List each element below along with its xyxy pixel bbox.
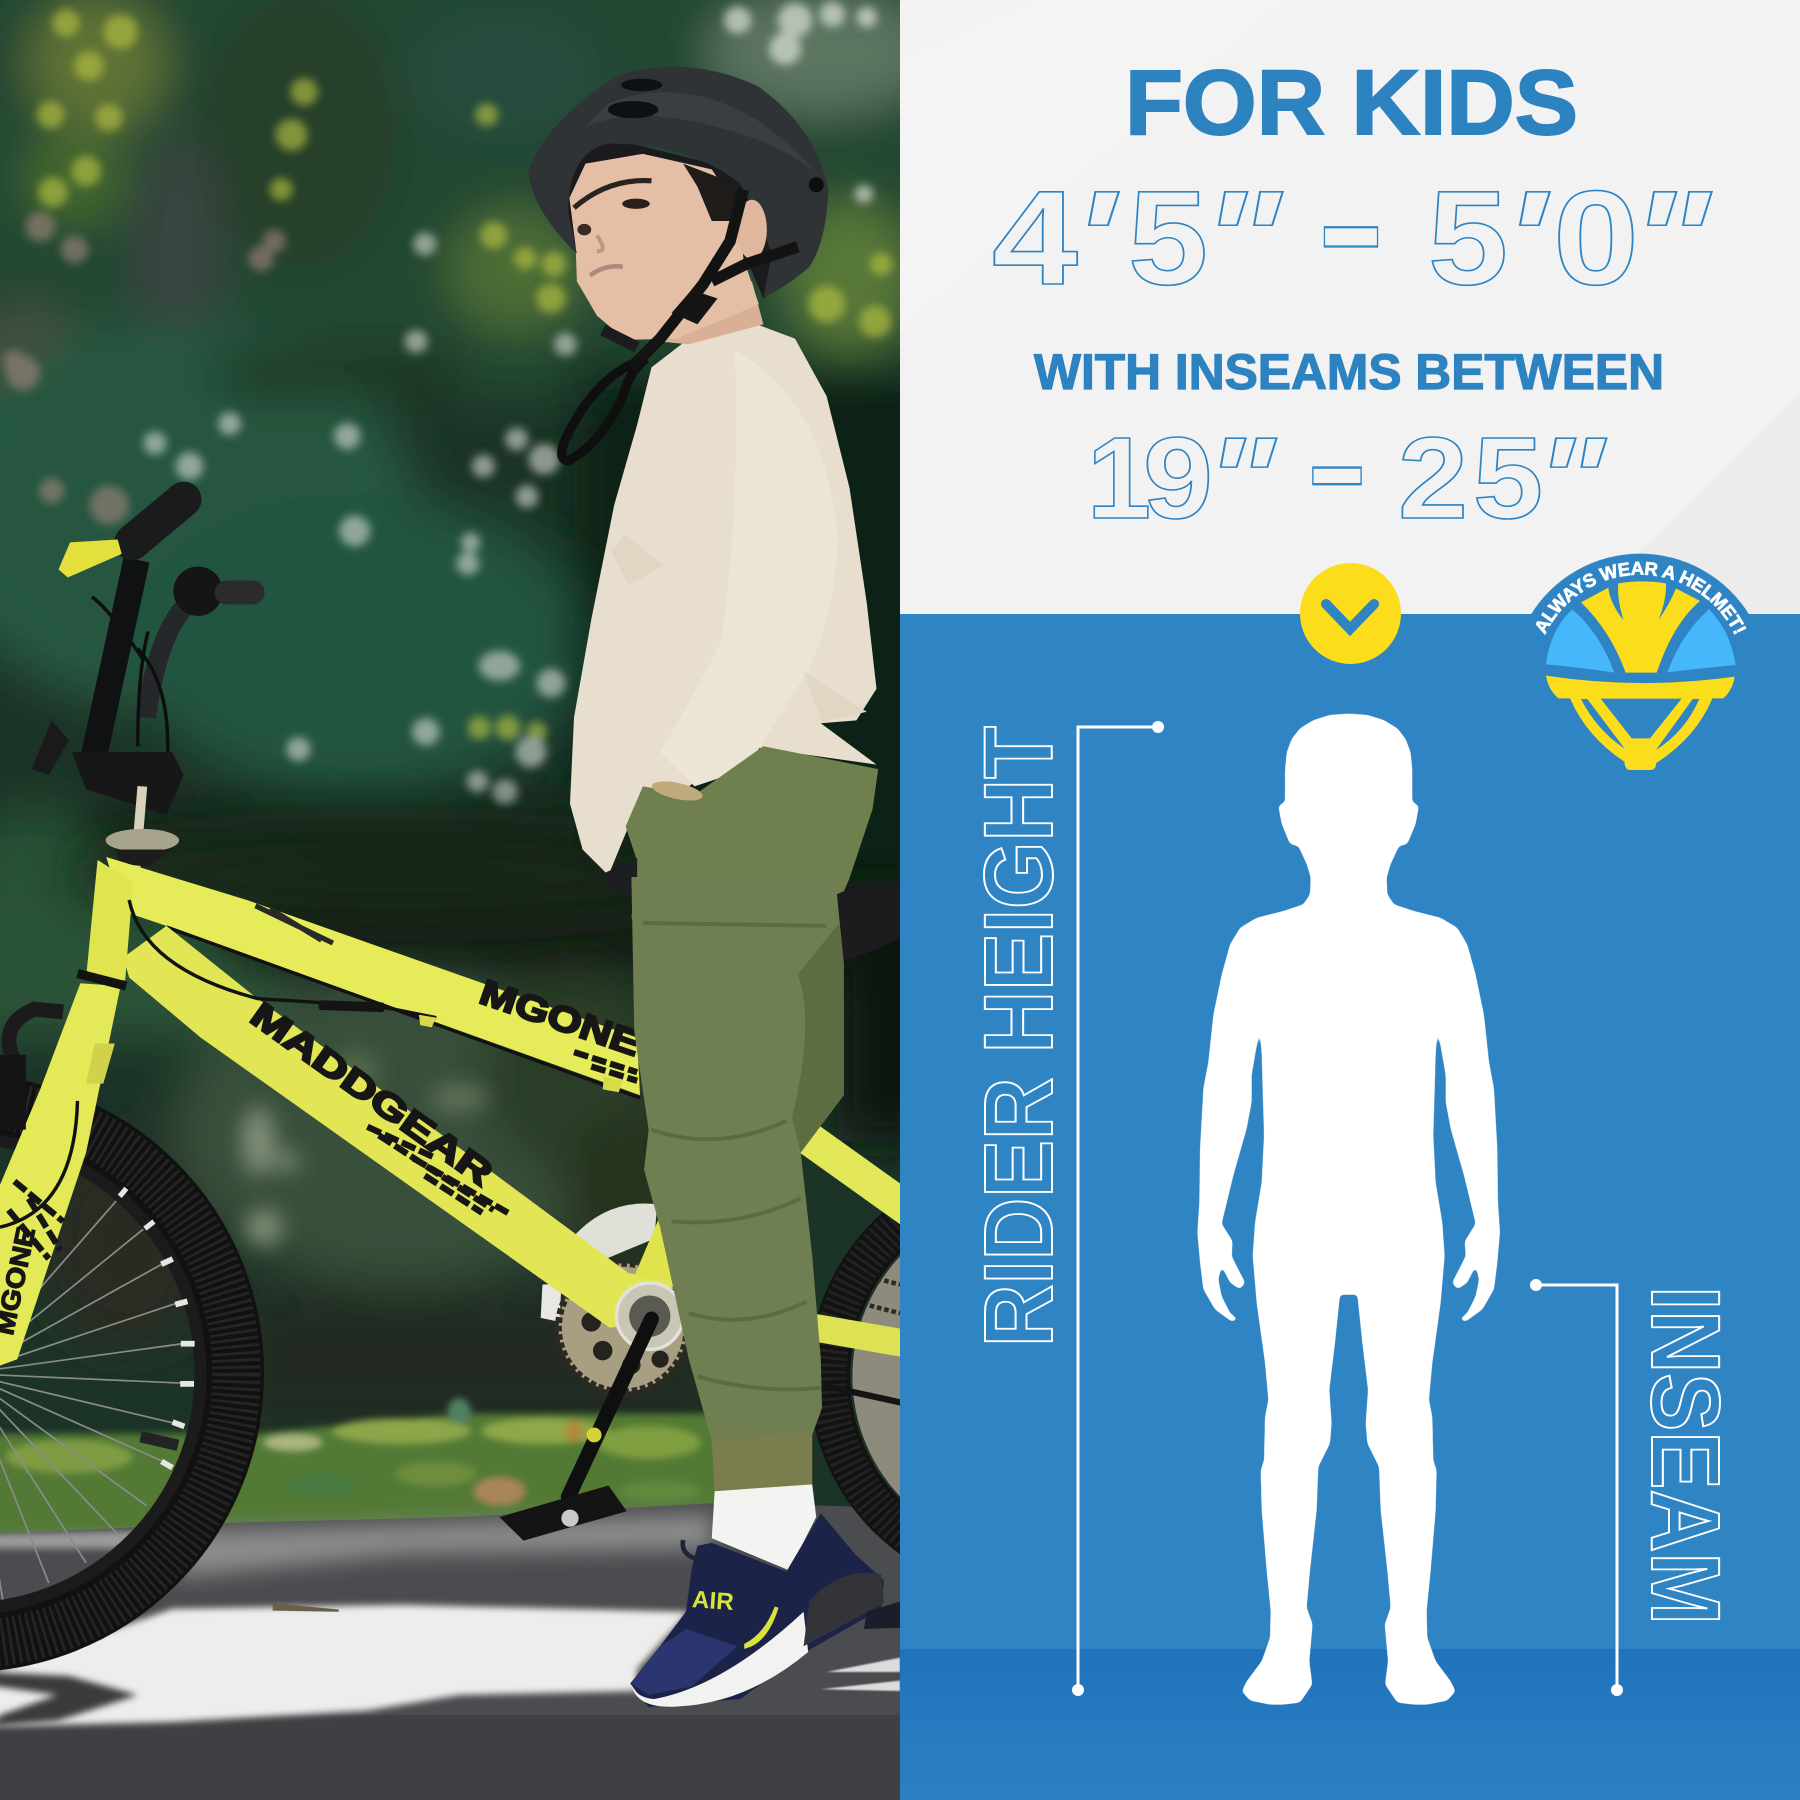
inseam range: 9	[1143, 413, 1213, 543]
bracket: rider height line	[1072, 721, 1164, 1696]
bracket: inseam line	[1530, 1279, 1623, 1696]
icon: yellow chevron button	[1300, 563, 1401, 664]
crank and pedal	[499, 1283, 683, 1541]
photo: boy standing over yellow bike	[0, 0, 900, 1800]
sneaker: AIR	[691, 1586, 735, 1616]
label: inseam: INSEAM	[1631, 1286, 1740, 1625]
badge: always wear a helmet	[1531, 554, 1749, 770]
helmet strap tail	[562, 359, 646, 461]
pants upper	[606, 746, 878, 918]
rider height range: 5	[1428, 164, 1508, 313]
pavement with sun patch	[0, 1503, 918, 1800]
inseam range: 5	[1473, 413, 1543, 543]
figure: child silhouette	[1197, 713, 1500, 1705]
yellow bike frame with decals: MGONE	[475, 972, 645, 1064]
panel: light header background	[900, 0, 1800, 614]
rider height range: 5	[1128, 164, 1208, 313]
badge: always wear a helmet: ALWAYS WEAR A HELMET!	[1536, 562, 1746, 635]
rider height range: '	[1072, 164, 1119, 313]
inseam range: "	[1205, 413, 1278, 543]
rider height range: "	[1630, 164, 1712, 313]
inseam range	[1087, 370, 1608, 558]
panel: blue measurement background	[900, 614, 1800, 1800]
helmet underside	[568, 144, 771, 298]
sneaker	[630, 1513, 900, 1707]
inseam range: –	[1310, 370, 1364, 558]
rider height range: 4	[992, 164, 1078, 313]
rider height range	[992, 114, 1712, 331]
head with face	[569, 154, 763, 344]
rear wheel, chainring and stays	[540, 1126, 900, 1554]
sock	[712, 1484, 816, 1570]
handlebar and stem	[32, 499, 253, 895]
saddle	[837, 884, 900, 960]
inseam range: "	[1535, 413, 1608, 543]
sweater	[570, 320, 876, 875]
front wheel	[0, 1103, 236, 1644]
inseam range: 2	[1398, 413, 1468, 543]
label: rider height: RIDER HEIGHT	[964, 726, 1073, 1347]
rider height range: '	[1503, 164, 1550, 313]
inseam range: 1	[1087, 413, 1151, 543]
rider height range: 0	[1553, 164, 1639, 313]
yellow bike frame with decals	[0, 857, 677, 1368]
grass verge	[0, 1398, 723, 1534]
heading: for kids: FOR KIDS	[1125, 52, 1578, 154]
helmet	[528, 67, 828, 367]
rider height range: –	[1321, 114, 1381, 331]
dark background blend behind bike	[70, 825, 730, 925]
subheading: with inseams between: WITH INSEAMS BETWEEN	[1034, 344, 1664, 400]
yellow bike frame with decals: MADDGEAR	[243, 994, 500, 1194]
pants and cuff	[631, 877, 844, 1492]
rider height range: "	[1201, 164, 1283, 313]
